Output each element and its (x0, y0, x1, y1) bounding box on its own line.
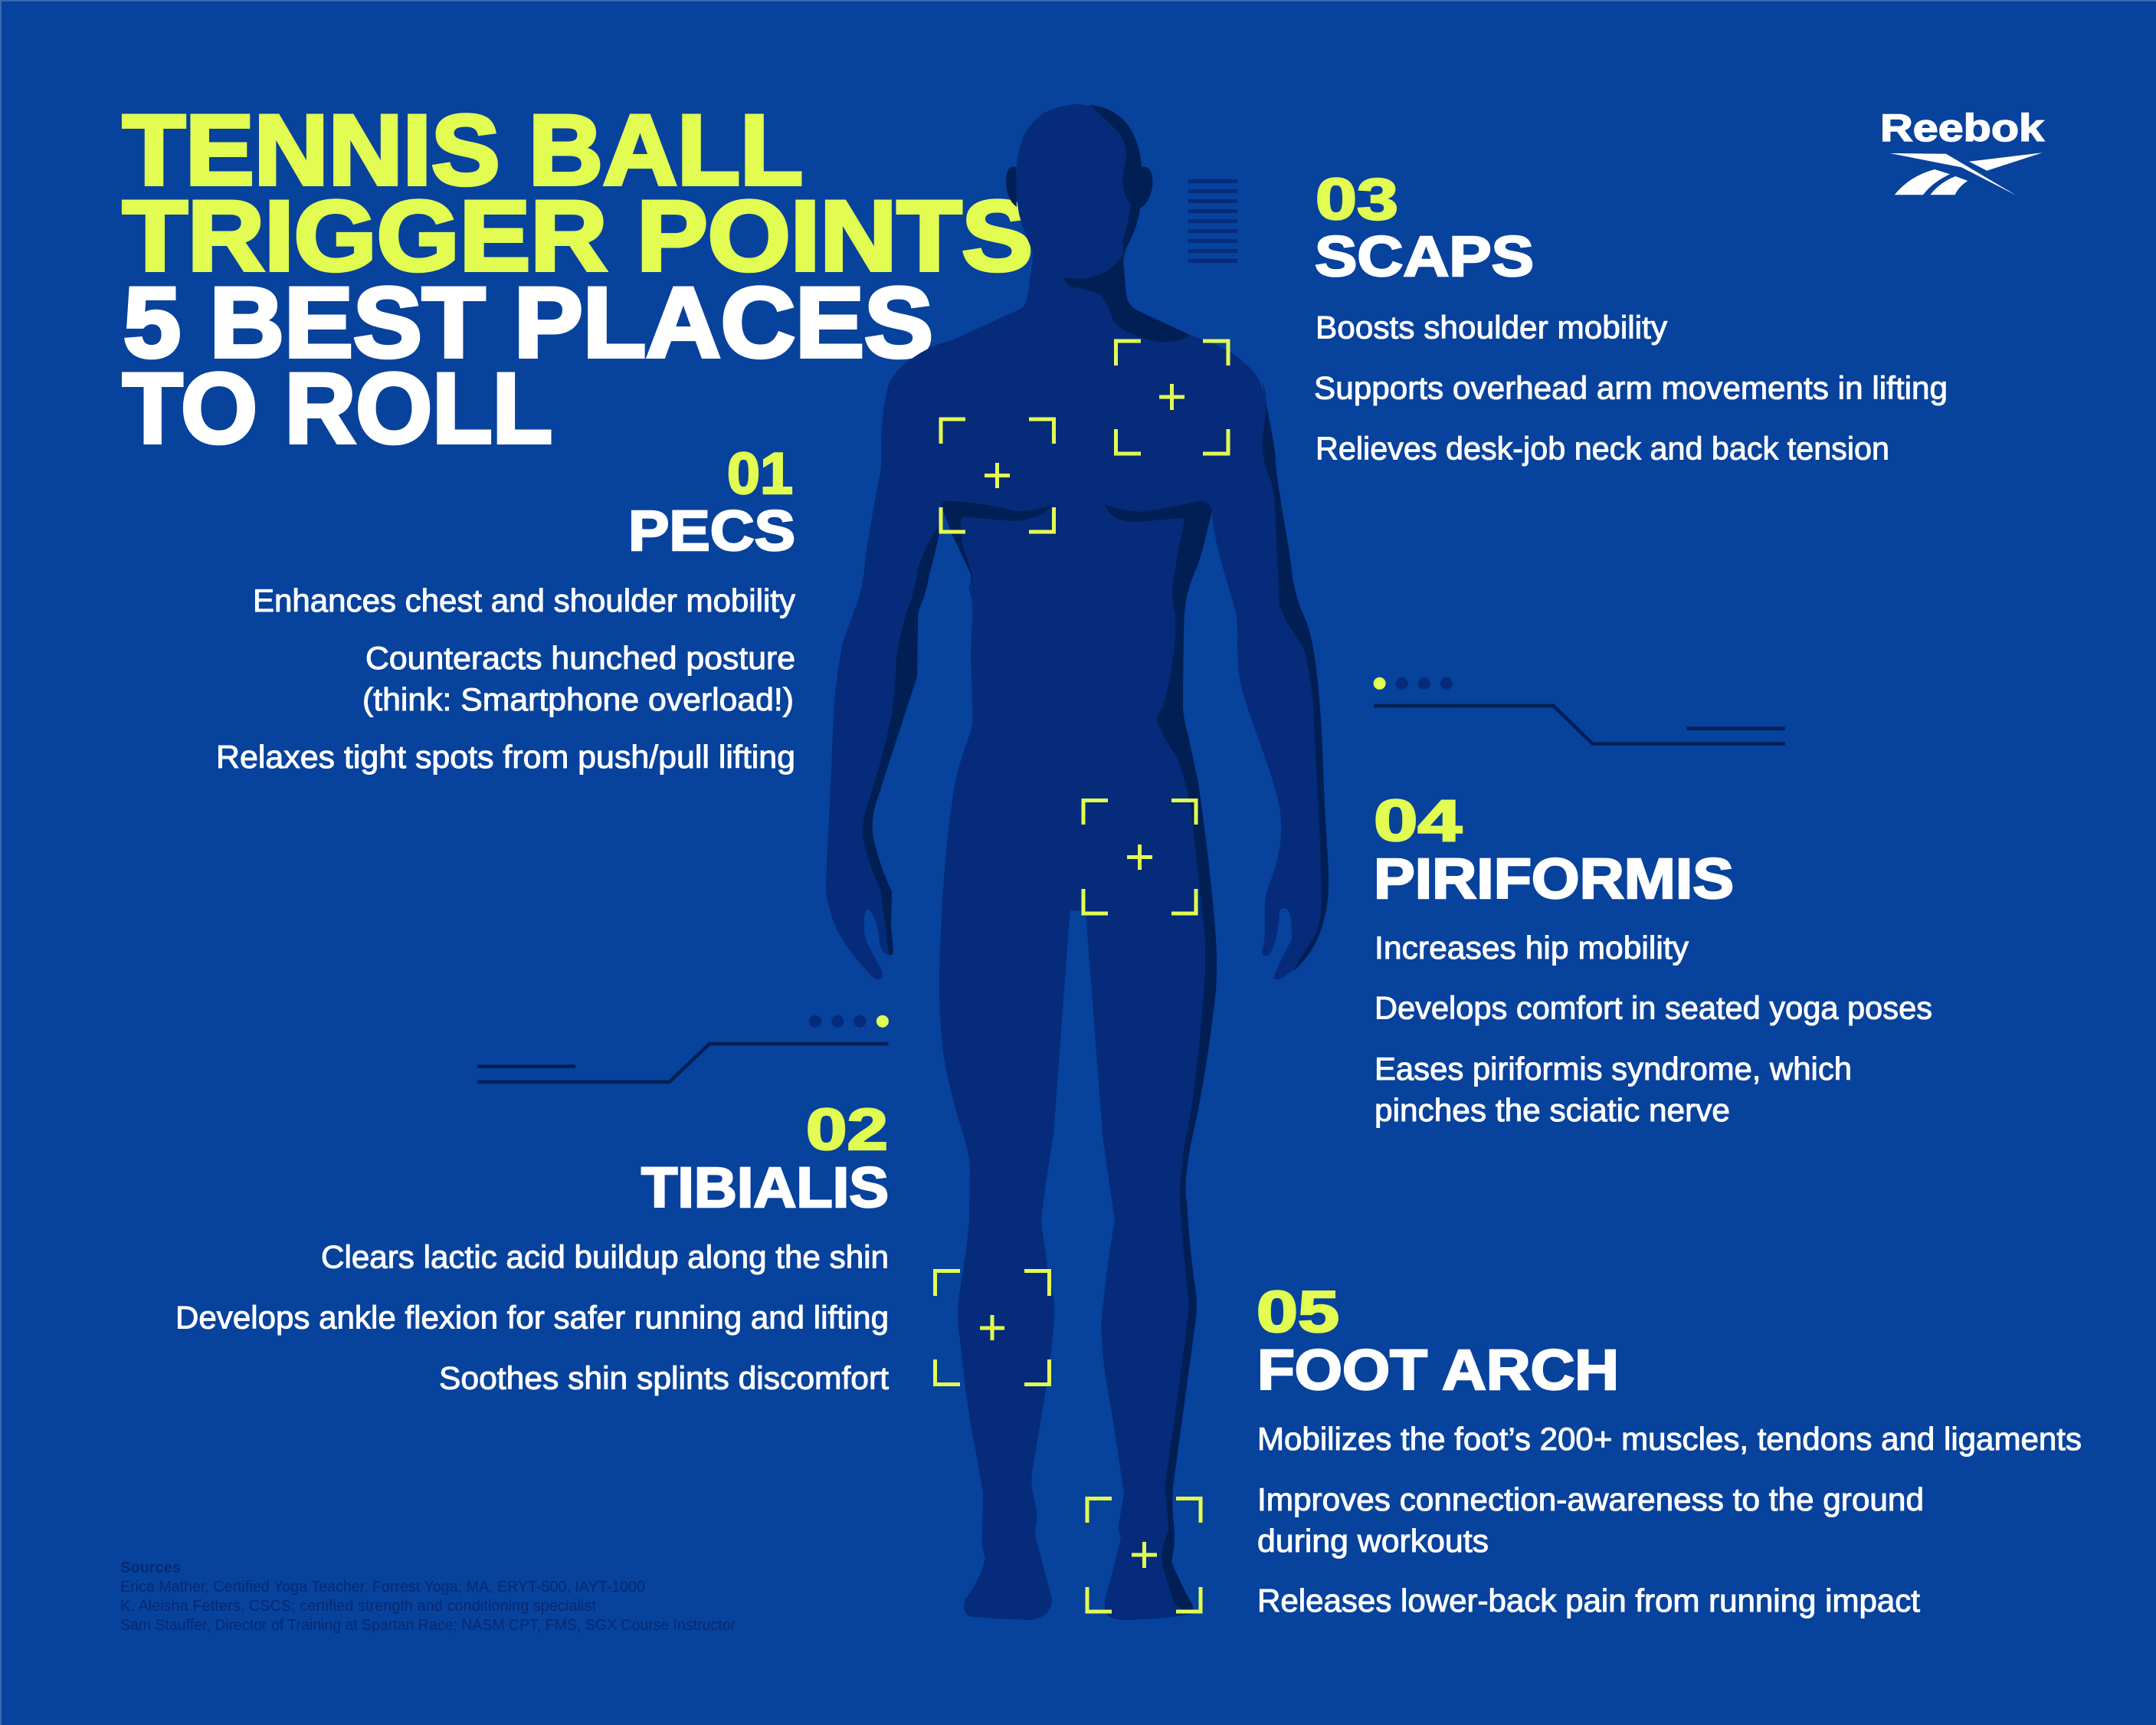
body base shape (826, 104, 1329, 1620)
sources (120, 1559, 736, 1634)
right lower leg shadow (1162, 1134, 1197, 1615)
title: TO ROLL (123, 353, 552, 464)
number 05: 05 (1257, 1280, 1339, 1345)
target: tibialis (935, 1271, 1050, 1384)
benefits list: Boosts shoulder mobility (1316, 310, 1667, 345)
left arm shadow (863, 521, 942, 955)
benefits list: Mobilizes the foot’s 200+ muscles, tendons and ligaments (1257, 1421, 2082, 1457)
benefits list: Eases piriformis syndrome, which (1375, 1051, 1852, 1087)
benefits list (175, 1238, 889, 1396)
number 02: 02 (806, 1097, 888, 1163)
panel: 04 piriformis (1374, 677, 1932, 1128)
benefits list: pinches the sciatic nerve (1375, 1092, 1730, 1128)
logo: Reebok: Reebok (1880, 107, 2044, 149)
logo: Reebok (1880, 107, 2044, 195)
benefits list (1257, 1421, 2082, 1618)
progress dots (1374, 677, 1453, 690)
benefits list: Clears lactic acid buildup along the shin (321, 1238, 889, 1275)
target: piriformis (1083, 800, 1196, 913)
title: TENNIS BALL (123, 93, 803, 205)
right chest and torso shadow (1105, 501, 1212, 613)
number 04: 04 (1374, 789, 1462, 854)
connector lines (477, 1044, 889, 1082)
right side of waist and thigh shadow (1157, 598, 1217, 1134)
right arm shadow (1262, 381, 1329, 972)
benefits list (1375, 930, 1932, 1128)
left chest and torso shadow (942, 501, 1053, 588)
panel: 03 scaps (1314, 167, 1948, 466)
neck shadow (1063, 254, 1190, 342)
sources: Sam Stauffer, Director of Training at Spartan Race; NASM CPT, FMS, SGX Course Instructor (120, 1617, 736, 1634)
sources: K. Aleisha Fetters, CSCS; certified strength and conditioning specialist (120, 1598, 596, 1615)
progress dots (809, 1015, 889, 1028)
benefits list: Counteracts hunched posture (365, 640, 795, 676)
title: 5 BEST PLACES (123, 267, 933, 379)
target: scaps (1116, 341, 1228, 454)
right ear (1140, 167, 1152, 208)
benefits list: Develops comfort in seated yoga poses (1375, 990, 1932, 1025)
benefits list: during workouts (1257, 1523, 1489, 1559)
number 01: 01 (727, 441, 793, 507)
head shadow (1089, 105, 1142, 254)
panel: 01 pecs (216, 441, 795, 775)
benefits list: Increases hip mobility (1375, 930, 1689, 966)
decorative stripes near head (1188, 179, 1237, 263)
heading: scaps: SCAPS (1315, 225, 1534, 288)
heading: foot arch: FOOT ARCH (1257, 1338, 1619, 1402)
benefits list: Enhances chest and shoulder mobility (253, 582, 795, 618)
icon: human body silhouette (826, 104, 1329, 1620)
benefits list: Relaxes tight spots from push/pull lifting (216, 739, 795, 775)
panel: 05 foot arch (1257, 1280, 2082, 1618)
heading: tibialis: TIBIALIS (641, 1156, 889, 1219)
benefits list: Supports overhead arm movements in lifting (1314, 369, 1948, 406)
title: TRIGGER POINTS (123, 179, 1033, 291)
sources: Erica Mather, Certified Yoga Teacher, Forrest Yoga; MA, ERYT-500, IAYT-1000 (120, 1579, 645, 1595)
benefits list: Develops ankle flexion for safer running and lifting (175, 1300, 889, 1335)
benefits list: (think: Smartphone overload!) (362, 681, 794, 717)
target: foot arch (1087, 1499, 1201, 1612)
benefits list: Improves connection-awareness to the ground (1257, 1481, 1924, 1517)
benefits list: Relieves desk-job neck and back tension (1316, 431, 1889, 466)
left ear (1006, 167, 1017, 207)
heading: pecs: PECS (628, 499, 795, 562)
sources: Sources (120, 1559, 181, 1576)
connector lines (1374, 706, 1785, 744)
benefits list (1314, 310, 1948, 466)
panel: 02 tibialis (175, 1015, 889, 1396)
heading: piriformis: PIRIFORMIS (1374, 847, 1734, 910)
benefits list (216, 582, 795, 775)
target: pecs (941, 419, 1054, 532)
title (123, 93, 1033, 464)
benefits list: Soothes shin splints discomfort (439, 1359, 889, 1396)
benefits list: Releases lower-back pain from running impact (1257, 1582, 1920, 1618)
number 03: 03 (1316, 167, 1398, 232)
